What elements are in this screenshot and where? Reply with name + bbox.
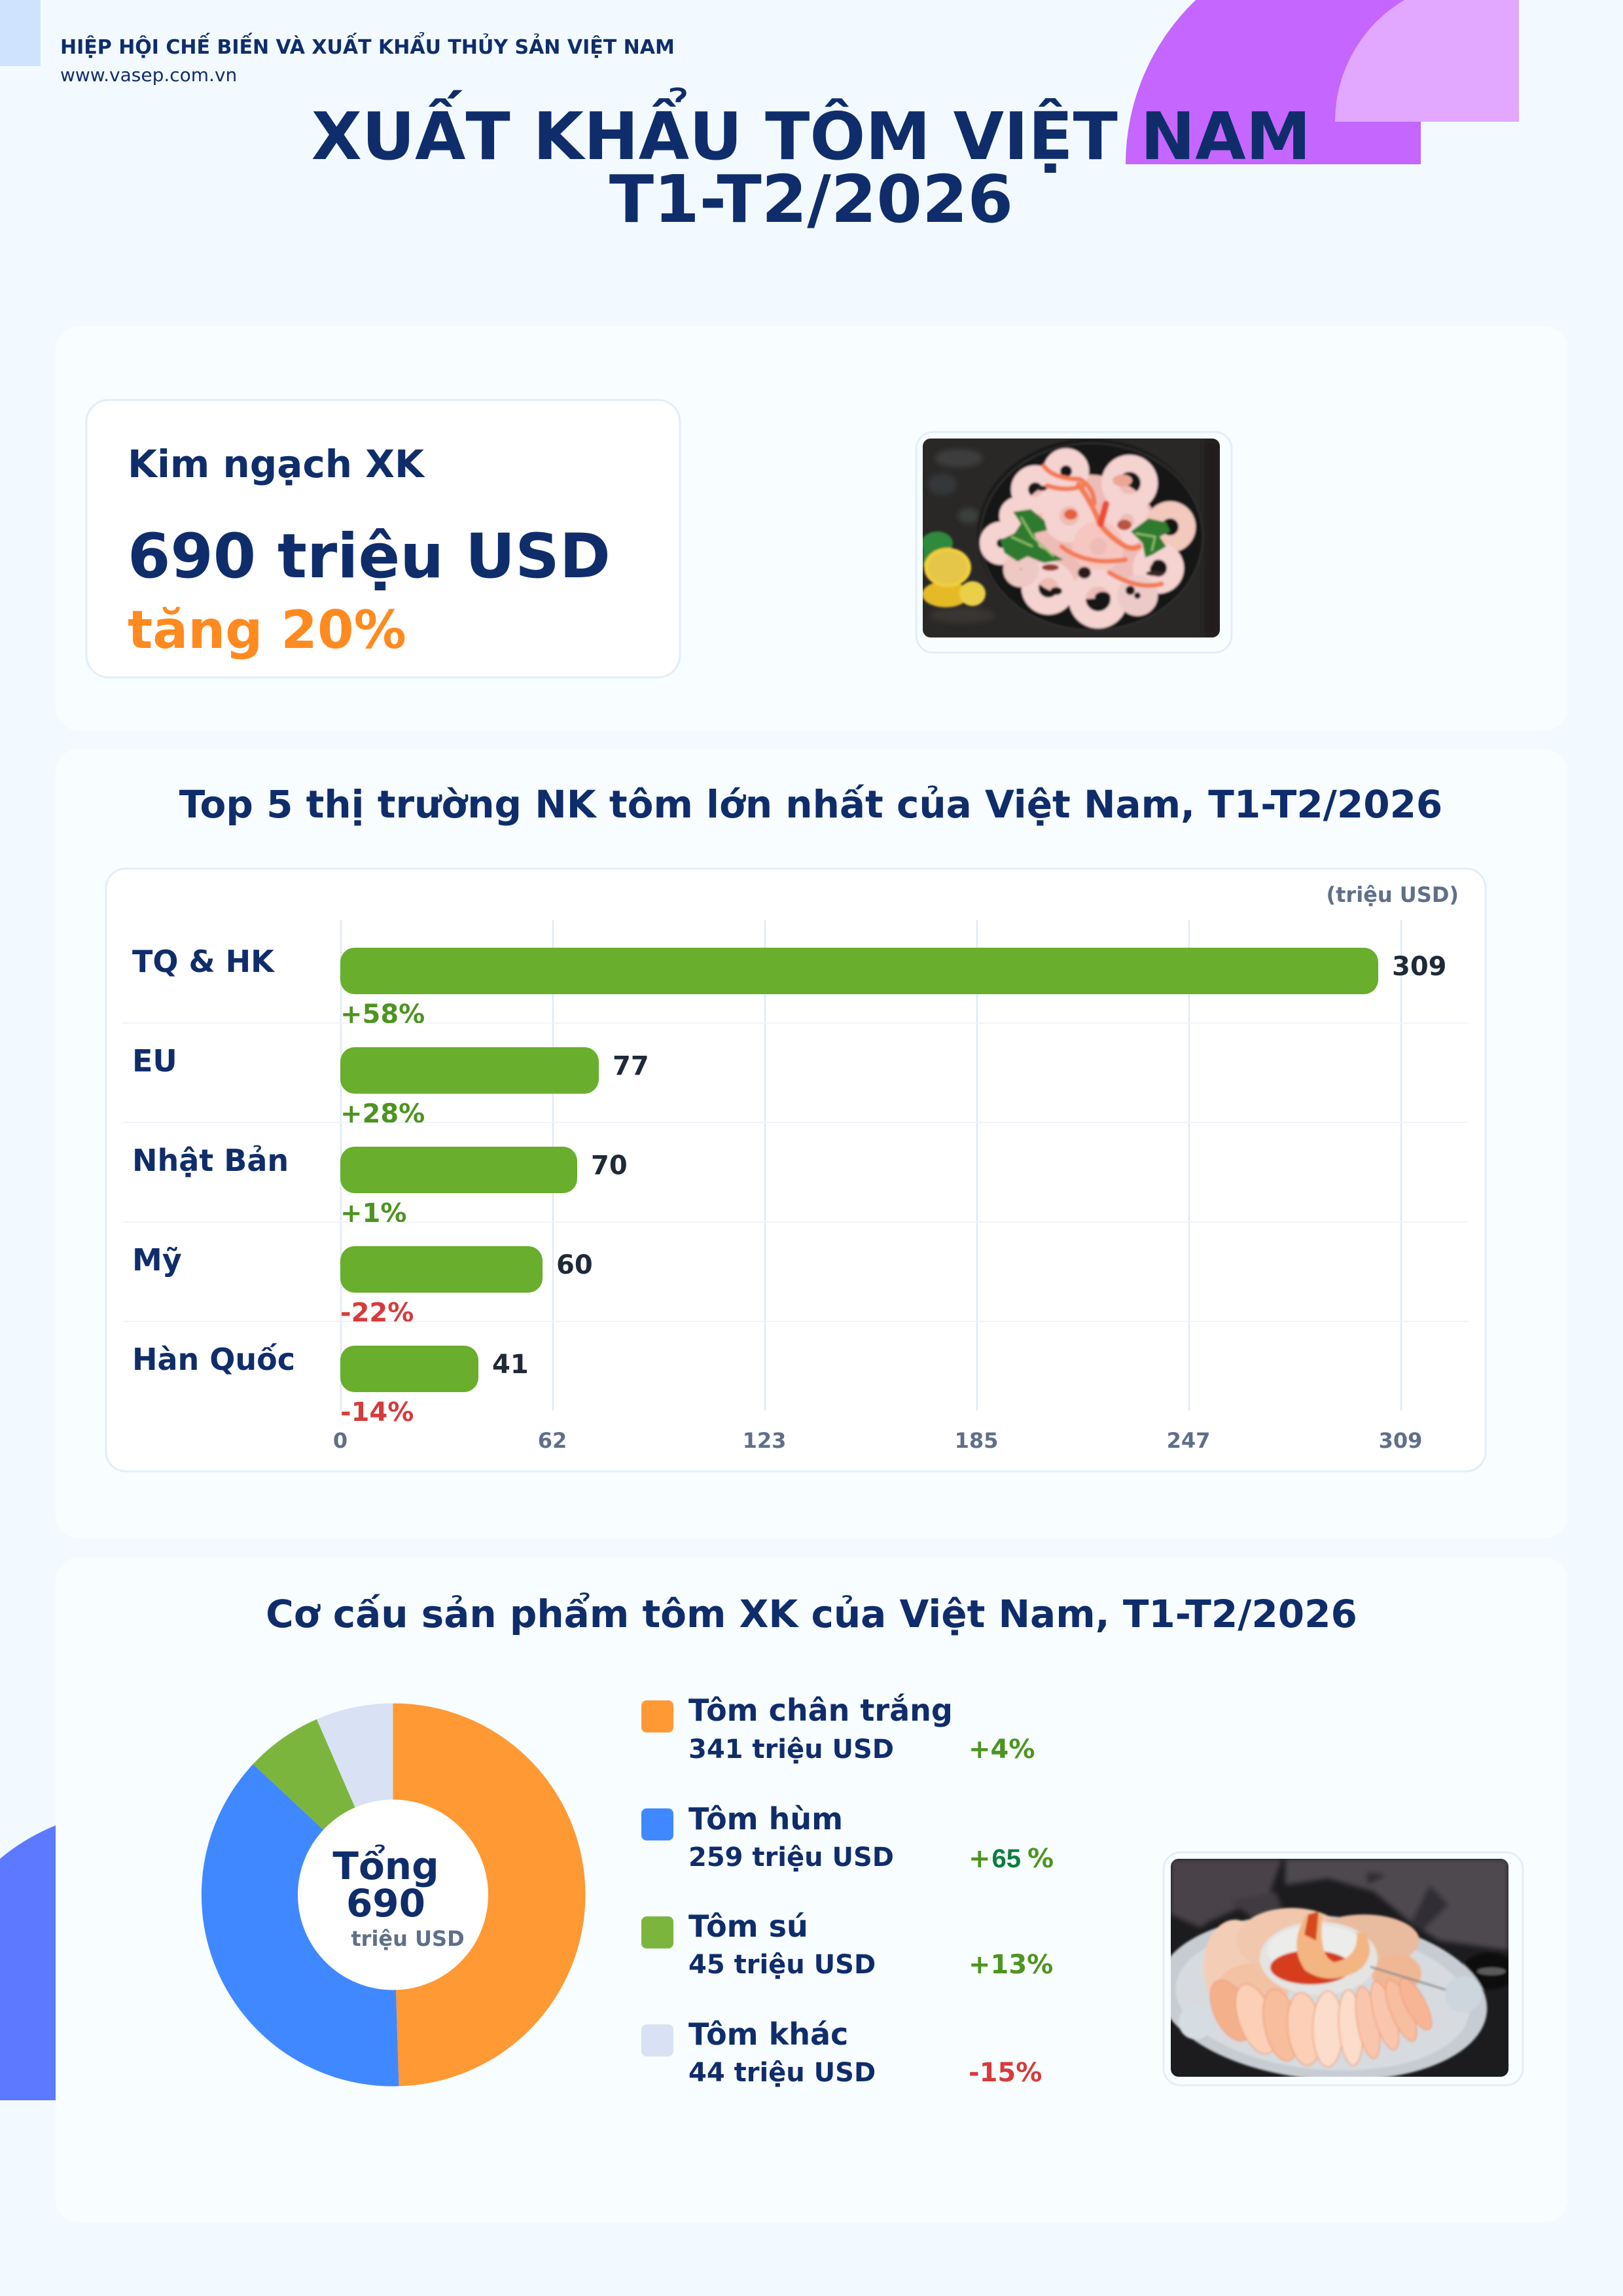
axis labels: 309: [1379, 1428, 1422, 1453]
bar chart: [106, 869, 1486, 1471]
header: organisation: [60, 32, 675, 86]
legend: Tôm khác: Tôm khác: [688, 2017, 848, 2052]
title: XUẤT KHẨU TÔM VIỆT NAM: [312, 87, 1311, 175]
axis labels: 123: [743, 1428, 786, 1453]
legend: Tôm sú: [641, 1909, 1053, 1980]
row: TQ & HK: 309: [1392, 952, 1446, 982]
row: TQ & HK: [132, 948, 1445, 1023]
spoon: [1463, 1952, 1508, 1991]
panel: product structure: [202, 1592, 1524, 2087]
row: Nhật Bản: Nhật Bản: [132, 1143, 289, 1178]
row: Hàn Quốc: [132, 1342, 529, 1427]
decorative shape: blue arc left: [0, 1825, 56, 2100]
donut centre label: triệu USD: [351, 1926, 465, 1951]
panel: export value: [85, 399, 1233, 678]
hanging shrimp: [1296, 1914, 1370, 1979]
row: TQ & HK: +58%: [340, 999, 425, 1030]
title: [312, 87, 1311, 238]
heading: top 5 markets: Top 5 thị trường NK tôm lớn nhất của Việt Nam, T1-T2/2026: [179, 782, 1442, 827]
KPI card: Kim ngạch XK: [128, 442, 425, 486]
donut centre label: 690: [346, 1881, 425, 1926]
legend: Tôm sú: +13%: [969, 1950, 1053, 1980]
lemons: [921, 531, 953, 555]
legend: Tôm khác: 44 triệu USD: [688, 2058, 876, 2088]
legend: Tôm khác: [641, 2017, 1042, 2088]
shrimp body: [1030, 473, 1156, 601]
photo: shrimp ring on white plate: [1151, 1852, 1523, 2093]
axis labels: 247: [1167, 1428, 1210, 1453]
legend: [641, 1693, 1054, 2088]
axis labels: 185: [955, 1428, 998, 1453]
fabric: [1171, 1859, 1508, 1950]
KPI card: 690 triệu USD: [128, 521, 611, 592]
donut chart: [202, 1703, 585, 2087]
row: Nhật Bản: +1%: [340, 1198, 406, 1229]
axis labels: [333, 1428, 1422, 1453]
row: EU: EU: [132, 1043, 177, 1079]
front shrimp: [1202, 1974, 1438, 2067]
bar chart: (triệu USD): [1326, 882, 1459, 907]
decorative block: top-left corner: [0, 0, 41, 66]
title: T1-T2/2026: [609, 161, 1013, 238]
axis labels: 62: [538, 1428, 567, 1453]
row: Hàn Quốc: -14%: [340, 1397, 414, 1427]
parsley: [1000, 509, 1170, 563]
decorative shape: purple arc: [1126, 0, 1421, 164]
legend: Tôm hùm: [641, 1801, 1054, 1874]
picks: [1179, 2005, 1213, 2039]
axis labels: 0: [333, 1428, 348, 1453]
row: Hàn Quốc: Hàn Quốc: [132, 1342, 295, 1377]
KPI card: [86, 400, 680, 677]
legend: Tôm chân trắng: 341 triệu USD: [688, 1734, 894, 1765]
row: Mỹ: 60: [556, 1250, 593, 1280]
shrimp orange strands: [1044, 466, 1162, 586]
legend: Tôm hùm: 259 triệu USD: [688, 1842, 894, 1873]
row: EU: 77: [613, 1051, 649, 1081]
row: Nhật Bản: 70: [591, 1151, 628, 1181]
decorative shape: light purple arc: [1335, 0, 1519, 122]
bowl: [1260, 1922, 1378, 1995]
legend: Tôm hùm: +65%: [969, 1844, 1054, 1874]
row: EU: +28%: [340, 1099, 425, 1129]
donut centre label: [332, 1844, 465, 1951]
legend: Tôm chân trắng: +4%: [969, 1734, 1035, 1765]
plate: [1151, 1902, 1494, 2093]
photo: shrimp on black plate: [916, 432, 1232, 653]
row: Mỹ: -22%: [340, 1298, 414, 1328]
row: Mỹ: [135, 1246, 592, 1321]
back ring of shrimp: [1204, 1920, 1266, 2014]
header: organisation: www.vasep.com.vn: [60, 64, 237, 86]
legend: Tôm hùm: Tôm hùm: [688, 1801, 843, 1837]
heading: product structure: Cơ cấu sản phẩm tôm XK của Việt Nam, T1-T2/2026: [266, 1592, 1357, 1636]
header: organisation: HIỆP HỘI CHẾ BIẾN VÀ XUẤT KHẨU THỦY SẢN VIỆT NAM: [60, 32, 675, 59]
row: EU: [135, 1047, 647, 1122]
row: Mỹ: Mỹ: [132, 1242, 182, 1278]
panel: top 5 markets: [105, 784, 1487, 1473]
legend: Tôm khác: -15%: [969, 2058, 1042, 2088]
legend: Tôm chân trắng: Tôm chân trắng: [688, 1693, 953, 1728]
row: Hàn Quốc: 41: [492, 1350, 529, 1380]
sauce: [1270, 1950, 1351, 1984]
legend: Tôm sú: 45 triệu USD: [688, 1950, 876, 1980]
row: Nhật Bản: [135, 1145, 626, 1222]
KPI card: tăng 20%: [128, 600, 406, 660]
legend: Tôm chân trắng: [641, 1693, 1035, 1765]
donut centre label: Tổng: [332, 1844, 439, 1888]
row: TQ & HK: TQ & HK: [132, 944, 276, 979]
legend: Tôm sú: Tôm sú: [688, 1909, 808, 1944]
